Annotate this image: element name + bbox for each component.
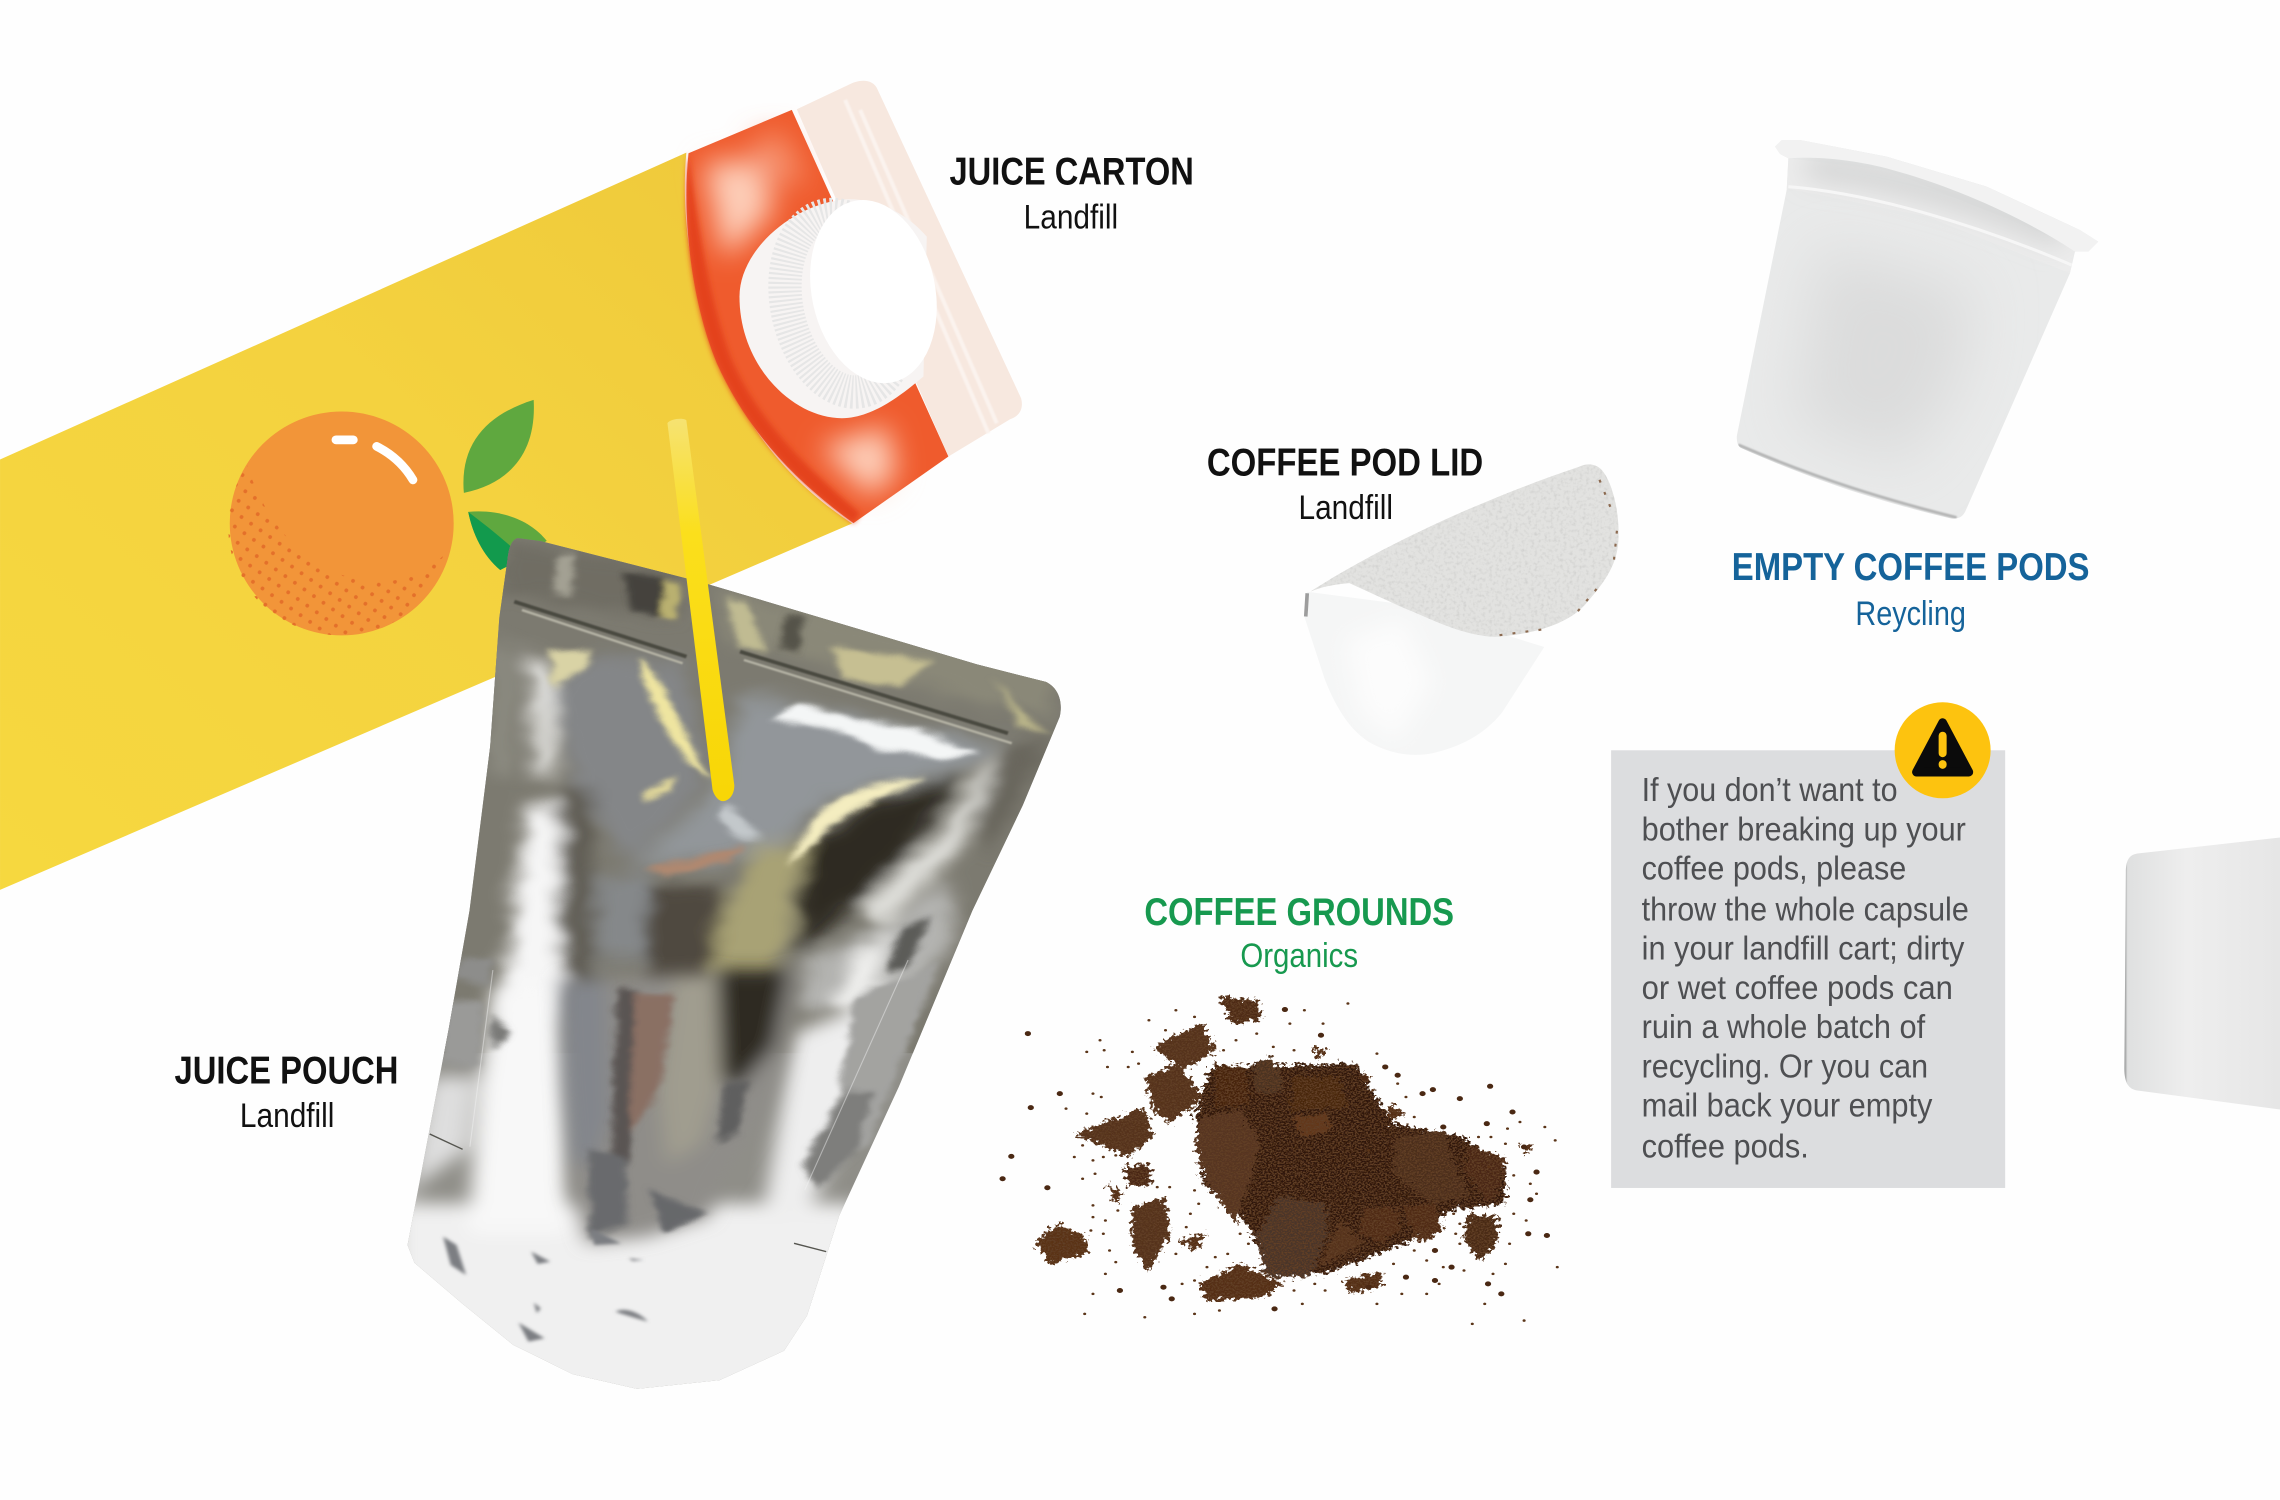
panel body text: ruin a whole batch of [1642,1009,1926,1046]
juice pouch heading: JUICE POUCH [175,1048,398,1092]
empty coffee pods category: Reycling [1855,595,1966,633]
pod shoulder [1787,158,2075,273]
tab crease lines [845,100,997,433]
right edge coffee pod crop [2124,838,2280,1109]
carton yellow body [0,153,852,890]
partial pod body [2124,838,2280,1109]
orange illustration [218,400,547,647]
lid filter highlight [1345,618,1432,742]
white sealed tab [797,81,1022,457]
label: juice pouch [175,1048,398,1135]
cap skirt [739,199,927,418]
panel body text: bother breaking up your [1642,811,1966,848]
pouch upper foil, in close-up coordinates [444,538,1061,1054]
panel body text: If you don’t want to [1642,772,1898,809]
lower foil streaks [441,957,939,1237]
upper foil highlights [549,553,1050,973]
panel background [1611,750,2005,1188]
label: empty coffee pods [1732,545,2089,633]
black triangle [1916,723,1969,772]
large coffee particles [1003,1010,1547,1309]
juice pouch [408,538,1061,1389]
label: coffee grounds [1144,890,1454,975]
panel body text: recycling. Or you can [1642,1048,1928,1085]
pouch bottom creases [443,1228,648,1342]
zipper highlight [522,610,1012,743]
lower leaf dark half [468,512,523,570]
coffee grounds heading: COFFEE GROUNDS [1144,890,1454,934]
red shoulder shading [703,133,897,497]
red shoulder [686,110,948,523]
juice carton [0,81,1022,890]
empty coffee pods heading: EMPTY COFFEE PODS [1732,545,2089,589]
lid crimped edge [1306,593,1307,617]
orange highlight [336,440,413,480]
juice carton heading: JUICE CARTON [950,150,1194,194]
coffee grounds category: Organics [1240,937,1358,975]
coffee chunks [1035,997,1534,1301]
orange fruit [230,411,454,635]
coffee grounds pile [1003,997,1557,1324]
panel body text: coffee pods. [1642,1128,1809,1165]
lid foil [1310,464,1619,637]
warning icon [1895,702,1991,798]
upper foil broad tones [489,540,1054,1013]
pod center shade [1793,247,1973,463]
upper foil base tone [444,538,1061,1054]
cap ribs [769,203,918,403]
panel body text: in your landfill cart; dirty [1642,931,1965,968]
small coffee particles [1066,1004,1557,1324]
lower white base [408,972,857,1389]
panel body text: throw the whole capsule [1642,891,1969,928]
label: juice carton [950,150,1194,236]
label: coffee pod lid [1207,440,1483,527]
callout panel: coffee pod warning [1611,702,2005,1188]
pouch metallic surface [408,538,1061,1389]
pouch lower foil, in close-up coordinates [395,957,939,1417]
pouch side seams [470,960,908,1190]
pouch seal ticks [430,1134,826,1252]
coffee pod lid [1304,464,1619,755]
pod rim [1775,140,2098,252]
lid coffee stains [1498,480,1617,635]
panel body text: mail back your empty [1642,1088,1933,1125]
pod shoulder shadow [1807,167,2063,237]
red shoulder dark edge [686,153,860,523]
yellow badge [1895,702,1991,798]
panel body text: coffee pods, please [1642,851,1906,888]
empty coffee pod [1720,130,2120,530]
zipper seams [514,602,1008,733]
cap face [794,188,953,395]
juice pouch straw [667,419,734,801]
exclamation mark [1940,736,1945,765]
pod shoulder groove [1788,187,2072,265]
panel body text [1642,772,1969,1165]
coffee pod lid category: Landfill [1298,489,1393,527]
pod silhouette and shading [1720,130,2120,530]
lower central dark fold [560,970,801,1243]
lower leaf [468,511,547,570]
upper leaf [463,400,534,493]
pod bottom edge [1738,445,1957,518]
juice carton category: Landfill [1024,198,1118,236]
pod base [1720,130,2120,530]
lid paper filter [1304,592,1544,755]
juice pouch category: Landfill [240,1097,334,1135]
pouch base [398,529,1069,1398]
panel body text: or wet coffee pods can [1642,970,1953,1007]
coffee pod lid heading: COFFEE POD LID [1207,440,1483,484]
orange dotted shadow [228,466,443,635]
carton top, red, in local coordinates [686,81,1022,523]
